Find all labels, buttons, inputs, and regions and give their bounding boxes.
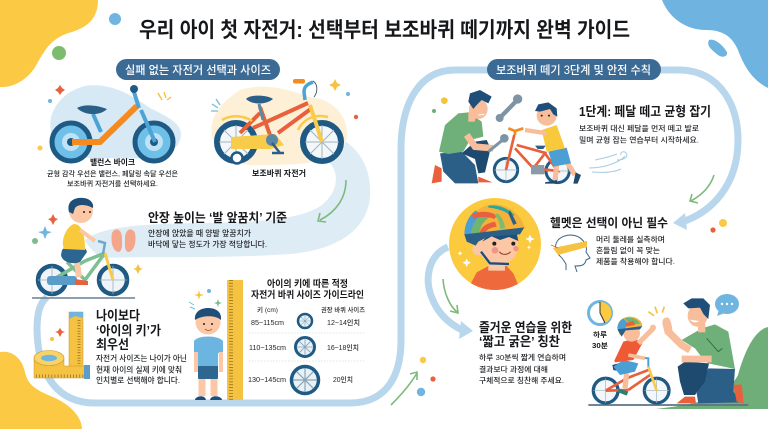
table row: 12-14 inch: 12~14인치	[327, 318, 360, 327]
illustration: bike with training wheels	[211, 79, 347, 165]
icon: wind lines	[589, 152, 627, 172]
table heading	[251, 278, 364, 301]
text: helmet description	[596, 234, 675, 266]
table column headers: 권장 바퀴 사이즈	[321, 305, 365, 314]
table row: 20 inch: 20인치	[333, 375, 353, 384]
caption: balance bike: 균형 감각 우선은 밸런스, 페달링 속달 우선은	[47, 169, 179, 178]
text: height over age: 나이보다	[96, 308, 140, 323]
heading pill: selection and size: 실패 없는 자전거 선택과 사이즈	[125, 63, 271, 77]
arrow: track to helmet	[660, 70, 738, 230]
illustration: balance bike	[50, 85, 181, 161]
text: height over age: ‘아이의 키’가	[96, 323, 161, 338]
icon: clock 30 minutes: 하루	[593, 330, 608, 339]
text: helmet heading: 헬멧은 선택이 아닌 필수	[550, 216, 668, 230]
illustration: child on bike	[32, 198, 135, 298]
text: height over age: 인치별로 선택해야 합니다.	[96, 375, 180, 385]
text: helmet description: 제품을 착용해야 합니다.	[596, 256, 675, 266]
panel: right section	[432, 59, 748, 405]
sparkles near tape	[50, 328, 65, 341]
caption: balance bike	[47, 157, 179, 188]
table row: 20 inch	[248, 366, 353, 394]
text: short practice: 결과보다 과정에 대해	[479, 364, 548, 374]
table row: 12-14 inch	[251, 314, 360, 328]
decorative dots top	[52, 13, 727, 60]
table: wheel size guide	[248, 278, 365, 394]
text: saddle height: 바닥에 닿는 정도가 가장 적당합니다.	[148, 239, 267, 249]
heading pill: three steps	[487, 59, 661, 80]
text: short practice: 하루 30분씩 짧게 연습하며	[479, 352, 566, 362]
heading pill: selection and size	[116, 59, 280, 80]
background blob: yellow bottom-left	[0, 352, 82, 429]
caption: training wheel bike: 보조바퀴 자전거	[252, 168, 306, 178]
table column headers	[257, 305, 365, 314]
dots right	[417, 219, 727, 396]
caption: balance bike: 밸런스 바이크	[90, 157, 136, 167]
text: step 1	[579, 104, 711, 144]
text: saddle height	[148, 210, 287, 249]
table heading: 아이의 키에 따른 적정	[267, 278, 348, 290]
panel: left section	[32, 59, 365, 400]
text: saddle height: 안장에 앉았을 때 양발 앞꿈치가	[148, 228, 252, 238]
icon: speech bubble	[715, 294, 739, 316]
icon: tape measure	[34, 312, 90, 379]
sparkles near balance bike	[38, 85, 171, 150]
text: saddle height: 안장 높이는 ‘발 앞꿈치’ 기준	[148, 210, 287, 225]
track: section outline	[37, 70, 488, 403]
icon: head measurement	[551, 235, 590, 272]
text: height over age: 현재 아이의 실제 키에 맞춰	[96, 364, 182, 374]
table row: 16-18 inch: 110~135cm	[249, 345, 286, 352]
winding band: light blue wave	[85, 138, 370, 258]
heading pill: three steps: 보조바퀴 떼기 3단계 및 안전 수칙	[496, 63, 651, 77]
table row: 16-18 inch: 16~18인치	[327, 343, 359, 352]
table row: 16-18 inch	[249, 338, 359, 356]
table heading: 자전거 바퀴 사이즈 가이드라인	[251, 289, 364, 301]
text: short practice: 구체적으로 칭찬해 주세요.	[479, 375, 564, 385]
arrow: helmet to praise	[428, 247, 473, 339]
background blob: green bottom-right	[656, 327, 768, 409]
text: step 1: 보조바퀴 대신 페달을 먼저 떼고 발로	[579, 123, 699, 133]
illustration: child with helmet in yellow circle	[449, 198, 541, 295]
text: height over age: 최우선	[96, 337, 129, 352]
text: height over age	[96, 308, 187, 385]
text: helmet description: 흔들림 없이 꼭 맞는	[596, 245, 660, 255]
green arrows	[318, 175, 714, 405]
sparkles near child	[32, 214, 143, 274]
background blob: yellow top-left	[0, 0, 98, 87]
text: short practice	[479, 320, 572, 385]
text: height over age: 자전거 사이즈는 나이가 아닌	[96, 353, 187, 363]
background blob: blue top-right	[662, 0, 768, 88]
sparkles near training bike	[211, 79, 358, 119]
text: short practice: ‘짧고 굵은’ 칭찬	[479, 334, 560, 349]
illustration: father fixing bike with child	[432, 90, 581, 184]
icon: feet on tiptoe	[111, 229, 136, 252]
illustration: boy with height ruler	[194, 280, 243, 400]
table row: 12-14 inch: 85~115cm	[251, 320, 284, 327]
table row: 20 inch: 130~145cm	[248, 377, 286, 384]
caption: balance bike: 보조바퀴 자전거를 선택하세요.	[67, 179, 158, 188]
title: 우리 아이 첫 자전거: 선택부터 보조바퀴 떼기까지 완벽 가이드	[139, 19, 630, 42]
illustration: high five	[588, 298, 748, 405]
table column headers: 키 (cm)	[257, 305, 278, 314]
text: helmet description: 머리 둘레를 실측하며	[596, 234, 665, 244]
text: step 1: 밀며 균형 잡는 연습부터 시작하세요.	[579, 134, 699, 144]
text: step 1: 1단계: 페달 떼고 균형 잡기	[579, 104, 711, 119]
sparkles above boy	[189, 289, 222, 309]
text: short practice: 즐거운 연습을 위한	[479, 320, 572, 335]
icon: clock 30 minutes	[588, 302, 612, 350]
icon: clock 30 minutes: 30분	[592, 342, 609, 350]
